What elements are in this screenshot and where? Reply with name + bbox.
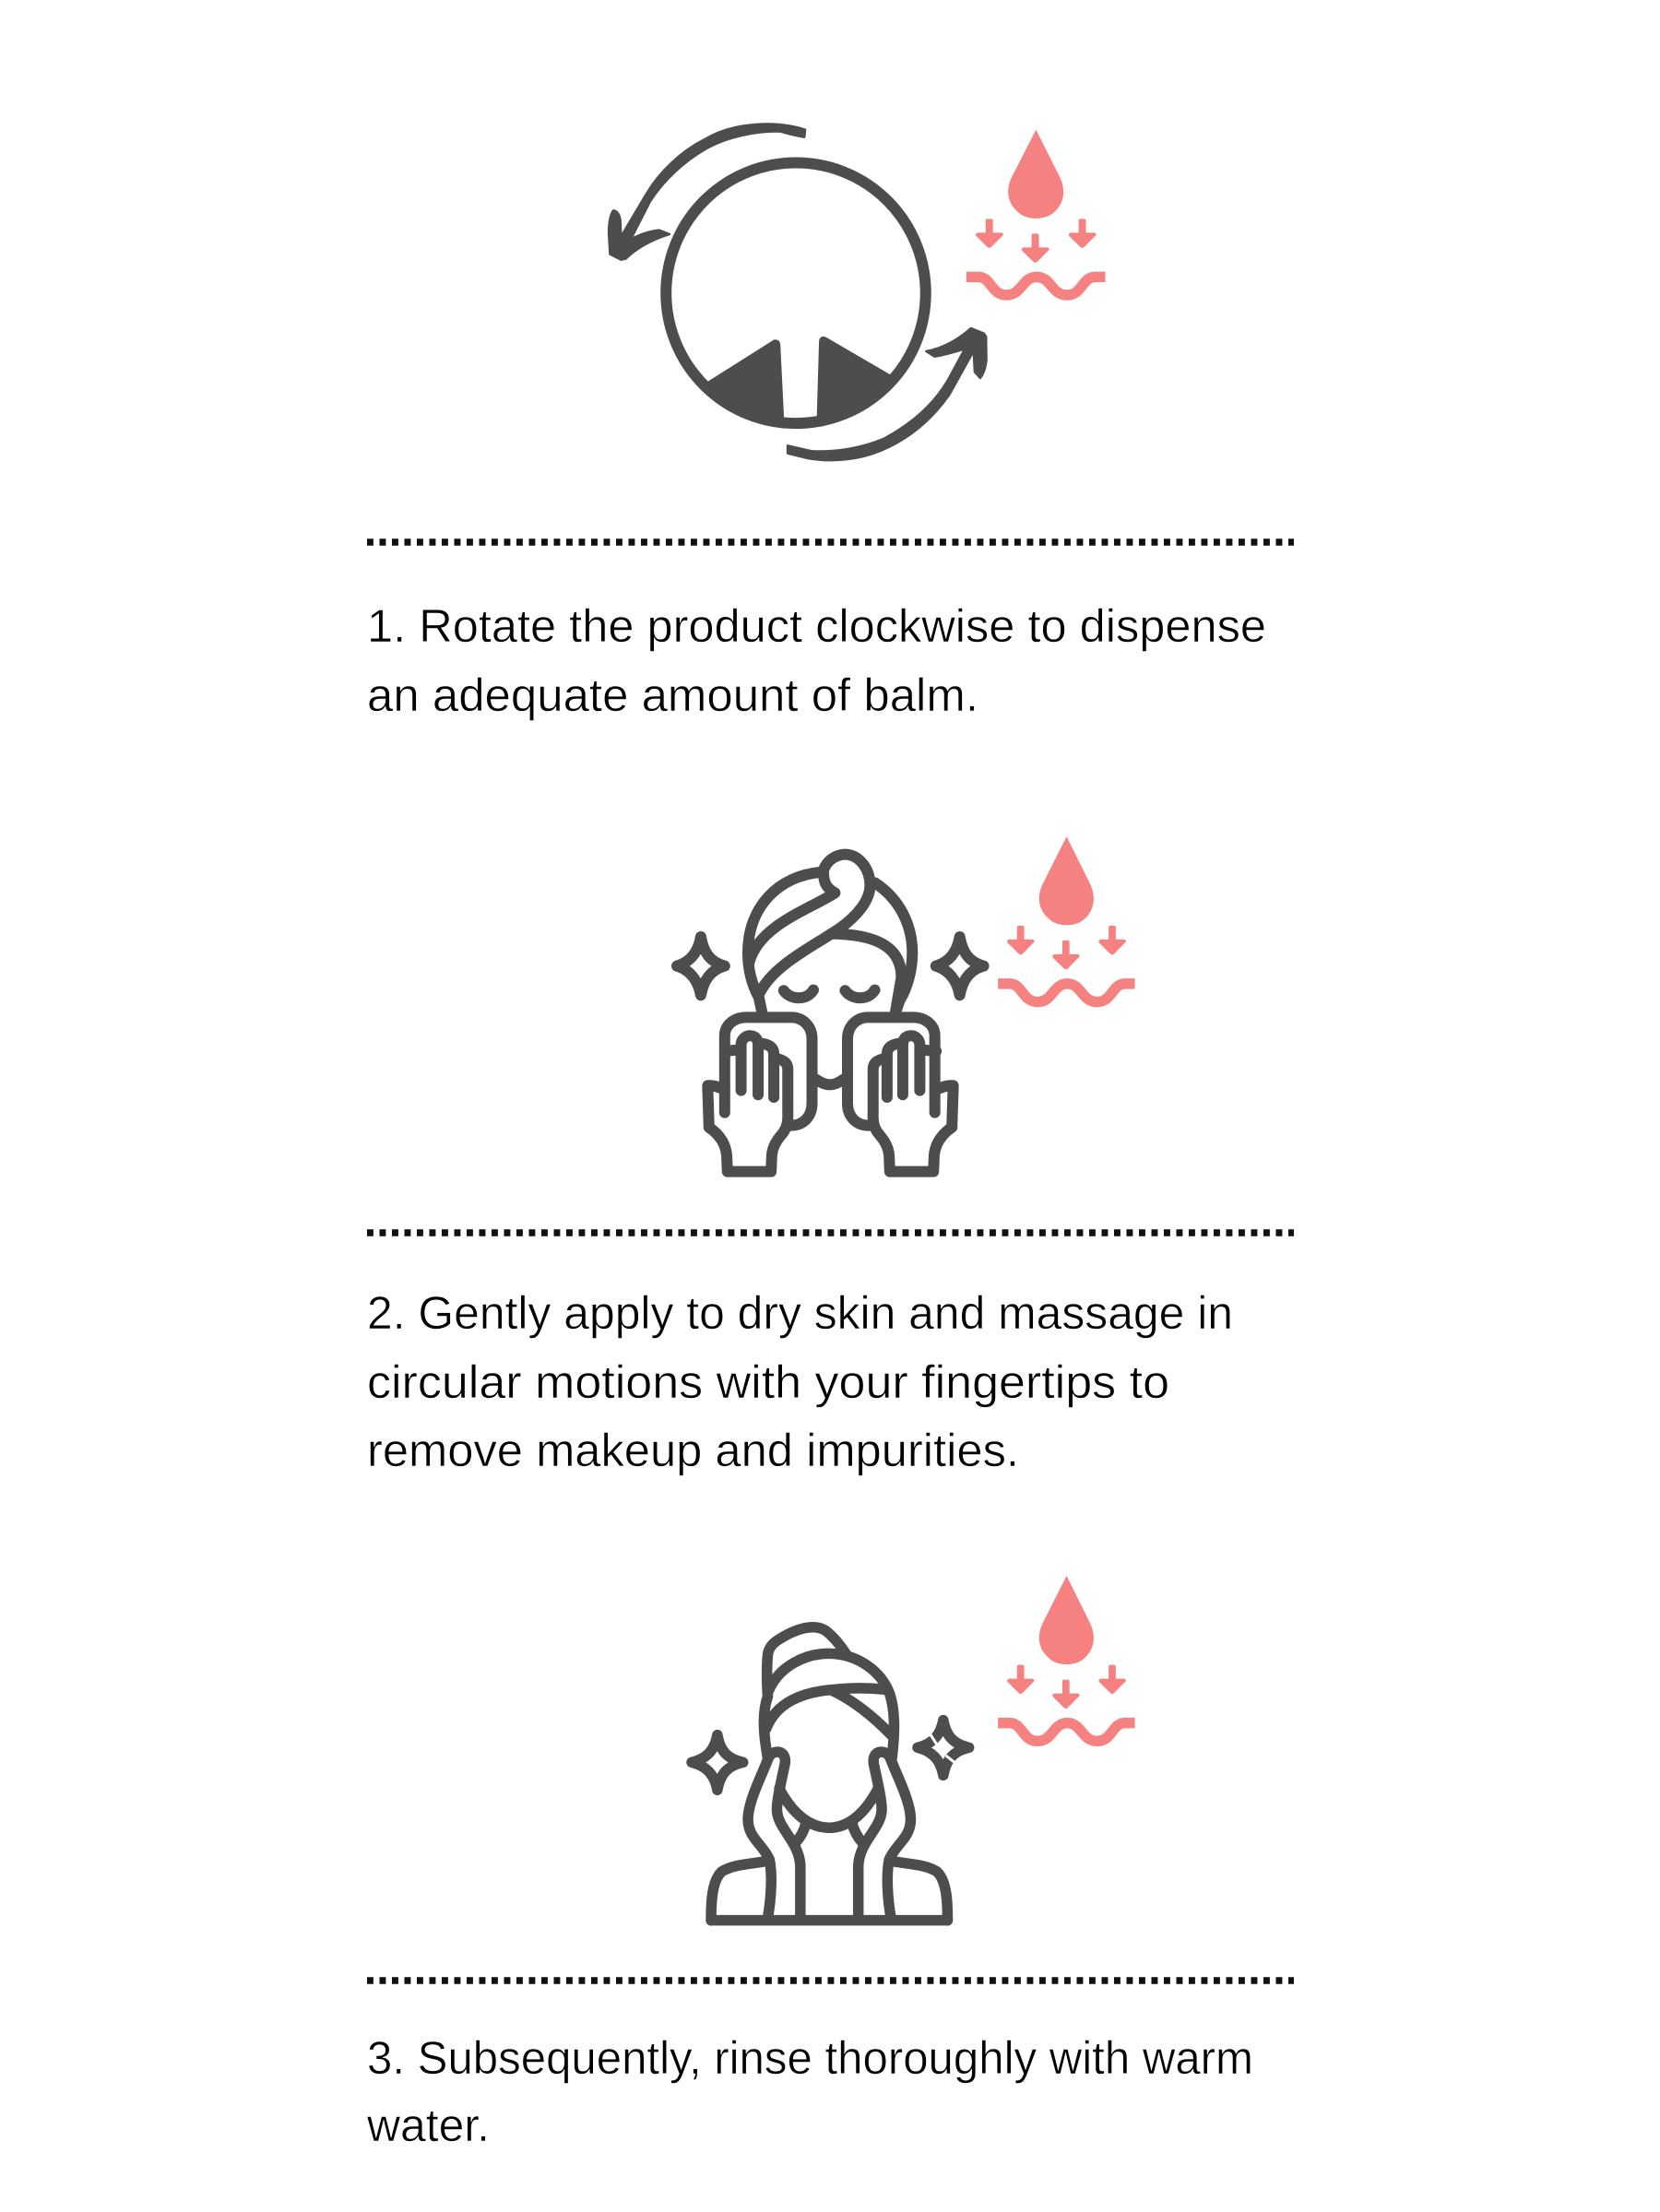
icon: pink drop absorbing into skin, step 3 — [998, 1576, 1135, 1741]
icon: arrow bottom-right — [788, 328, 987, 460]
icon: right pad — [848, 1017, 935, 1126]
icon: towel and face — [764, 1627, 894, 1842]
icon: sparkle right — [918, 1721, 969, 1775]
text: step 1 — [367, 600, 1266, 721]
icon: rotating balm stick with arrows — [609, 124, 987, 460]
icon: left hand — [707, 1035, 788, 1172]
icon: counter arrow top-left — [609, 124, 805, 260]
icon: base line — [711, 1915, 947, 1925]
icon: sparkle left — [677, 937, 725, 995]
icon: round balm case — [666, 162, 926, 423]
text: step 2: circular motions with your fingertips to — [367, 1356, 1169, 1408]
text: step 2: 2. Gently apply to dry skin and massage in — [367, 1287, 1233, 1339]
icon: dark wedges at base of case — [707, 337, 891, 423]
text: step 3: water. — [366, 2100, 490, 2151]
icon: sparkle right — [936, 937, 984, 995]
text: step 3: 3. Subsequently, rinse thoroughly with warm — [367, 2032, 1253, 2084]
icon: left pad — [725, 1017, 812, 1126]
icon: towel turban and face — [748, 855, 912, 1084]
icon: woman in towel massaging face with pads — [677, 855, 984, 1172]
icon: left hand and shoulder — [711, 1752, 800, 1921]
icon: right hand and shoulder — [859, 1752, 947, 1921]
icon: woman in towel with hands on cheeks — [692, 1627, 969, 1921]
text: step 2: remove makeup and impurities. — [367, 1425, 1019, 1476]
text: step 1: 1. Rotate the product clockwise to dispense — [367, 600, 1266, 652]
icon: pink drop absorbing into skin, step 2 — [998, 836, 1135, 1002]
text: step 2 — [367, 1287, 1233, 1476]
icon: sparkle left — [692, 1735, 743, 1790]
icon: pink drop absorbing into skin, step 1 — [966, 130, 1105, 295]
text: step 1: an adequate amount of balm. — [367, 669, 978, 721]
text: step 3 — [366, 2032, 1253, 2151]
icon: right hand — [873, 1035, 954, 1172]
